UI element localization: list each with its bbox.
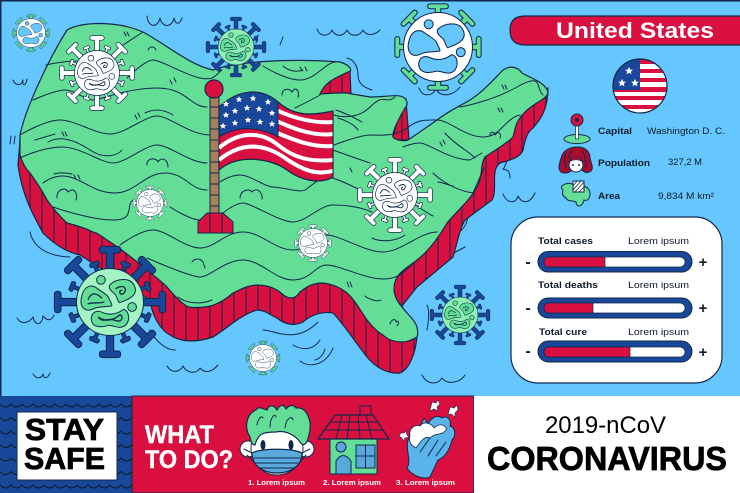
what to do heading: TO DO? [145, 446, 233, 474]
population row [559, 147, 702, 173]
what to do heading [145, 421, 233, 474]
virus: large white with green spikes [395, 4, 481, 90]
step labels: 3. Lorem ipsum [396, 478, 455, 487]
step labels: 1. Lorem ipsum [248, 478, 305, 487]
area row: 9,834 M km² [658, 191, 714, 202]
total cases bar: Total cases [538, 236, 593, 247]
virus: white east [358, 158, 432, 232]
icon: map pin [564, 114, 590, 144]
flag pole [210, 96, 219, 214]
virus: small white center-left [133, 186, 167, 220]
total cases bar: Lorem ipsum [628, 236, 689, 247]
title banner [510, 16, 740, 45]
virus: blue southeast [430, 285, 490, 345]
total cure bar: Lorem ipsum [628, 327, 689, 338]
stats panel [511, 217, 722, 383]
map contour waves [20, 32, 543, 303]
map side wall [18, 88, 548, 373]
area row [561, 181, 714, 206]
virus: big blue southwest [54, 246, 166, 358]
stay safe panel: SAFE [24, 441, 105, 476]
virus: top-left small [13, 15, 49, 51]
capital row: Washington D. C. [647, 126, 725, 137]
virus: small green-spiked sea [246, 341, 280, 375]
what to do panel [132, 396, 474, 493]
total cure bar [525, 327, 708, 362]
virus: small white south [295, 225, 331, 261]
icon: gloved hand [399, 400, 458, 478]
coronavirus panel [474, 396, 740, 493]
virus: white on map top-left [60, 36, 134, 110]
icon: house [318, 406, 389, 474]
population row: Population [598, 158, 650, 169]
map of the United States [18, 24, 548, 373]
map top surface [20, 24, 548, 342]
american flag [219, 92, 333, 181]
stay safe panel: STAY [25, 412, 104, 447]
pole ball [205, 80, 223, 98]
total cases bar: - [525, 254, 531, 271]
total deaths bar: - [525, 300, 531, 317]
virus: blue and green top [206, 17, 266, 77]
pole base [198, 213, 233, 233]
icon: area map [561, 181, 590, 206]
capital row: Capital [598, 126, 632, 137]
coronavirus panel: CORONAVIRUS [487, 440, 727, 477]
total deaths bar: + [699, 300, 708, 317]
total cure bar: Total cure [539, 327, 587, 338]
population row: 327,2 M [668, 157, 702, 168]
total cure bar: - [525, 343, 531, 360]
map grass tufts [57, 32, 507, 326]
capital row [564, 114, 725, 144]
flag on pole [198, 80, 333, 233]
great lakes side wall [318, 71, 409, 140]
icon: masked face [240, 405, 314, 475]
title banner: United States [556, 18, 714, 43]
total deaths bar [525, 280, 708, 318]
step labels [248, 478, 455, 487]
water ripples [10, 16, 535, 383]
step labels: 2. Lorem ipsum [323, 478, 381, 487]
coronavirus panel: 2019-nCoV [545, 412, 666, 439]
total deaths bar: Total deaths [538, 280, 598, 291]
total cure bar: + [699, 344, 708, 361]
area row: Area [598, 191, 621, 202]
icon: round flag [612, 58, 668, 113]
total cases bar [525, 236, 708, 272]
what to do heading: WHAT [145, 421, 214, 449]
total cases bar: + [699, 254, 708, 271]
icon: person [559, 147, 592, 173]
stay safe panel [0, 396, 132, 493]
total deaths bar: Lorem ipsum [628, 280, 689, 291]
